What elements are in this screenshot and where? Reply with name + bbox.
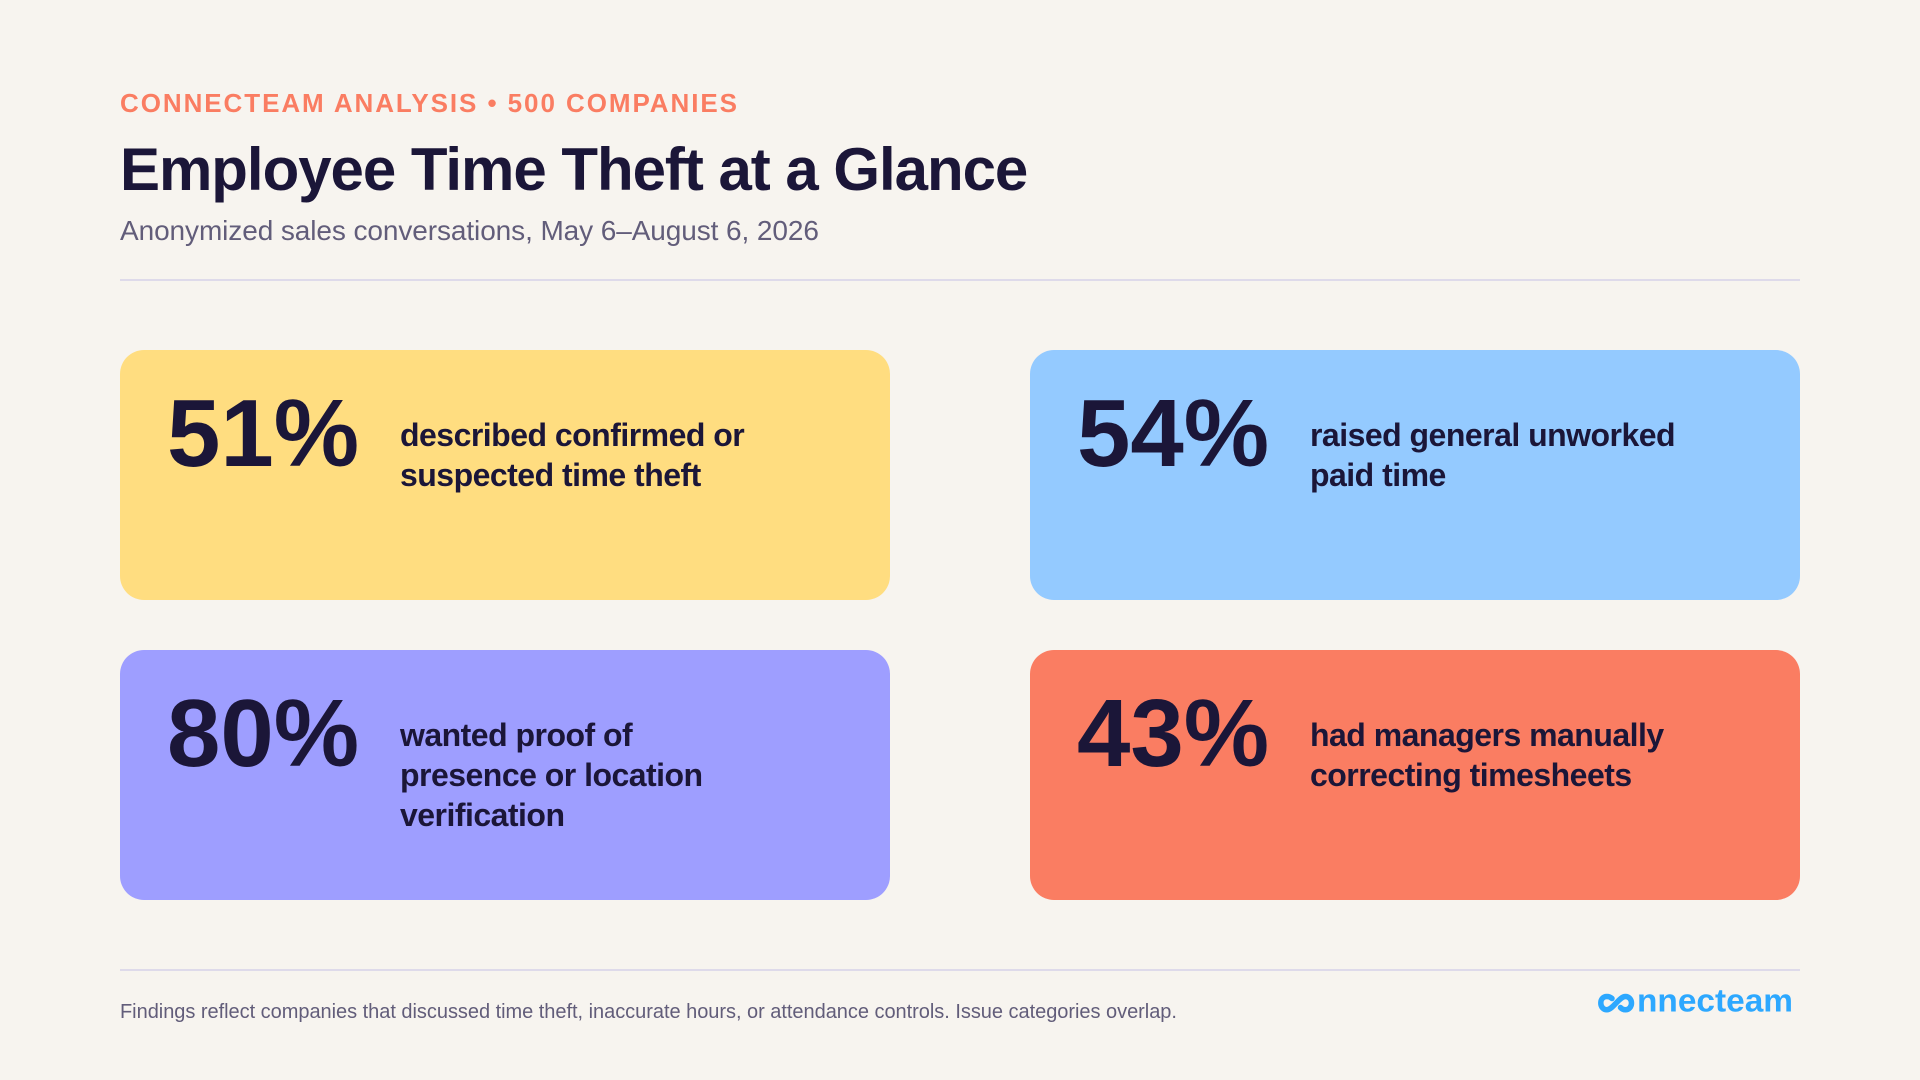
panel: 43% [1030,650,1800,900]
panel: 80% [120,650,890,900]
stat: 80%: 80% [167,680,359,787]
title: Employee Time Theft at a Glance [120,136,1027,203]
label: 80%: verification [400,797,564,833]
subtitle: Anonymized sales conversations, May 6–August 6, 2026 [120,215,819,246]
label: 43%: had managers manually [1310,717,1664,753]
eyebrow: CONNECTEAM ANALYSIS • 500 COMPANIES [120,88,739,118]
panel: 54% [1030,350,1800,600]
stat: 51%: 51% [167,380,359,487]
label: 80%: presence or location [400,757,703,793]
label: 54%: raised general unworked [1310,417,1675,453]
panel: 51% [120,350,890,600]
footnote: Findings reflect companies that discussed time theft, inaccurate hours, or attendance controls. Issue categories overlap. [120,1001,1177,1023]
label: 51% [400,417,744,493]
label: 80% [400,717,703,833]
label: 54%: paid time [1310,457,1446,493]
label: 80%: wanted proof of [400,717,632,753]
stat: 54%: 54% [1077,380,1269,487]
label: 43%: correcting timesheets [1310,757,1632,793]
label: 54% [1310,417,1675,493]
label: 43% [1310,717,1664,793]
label: 51%: described confirmed or [400,417,744,453]
label: 51%: suspected time theft [400,457,701,493]
stat: 43%: 43% [1077,680,1269,787]
